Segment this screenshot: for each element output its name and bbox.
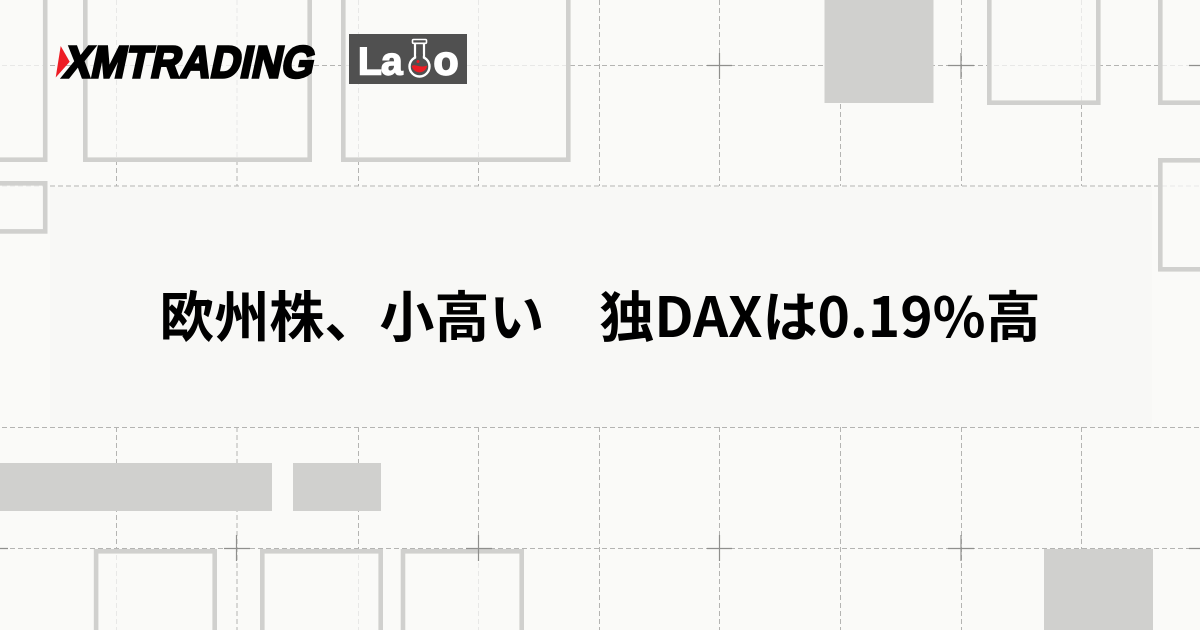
panel: centre title band [50, 187, 1152, 427]
icon: flask [410, 40, 430, 76]
solid bar: lower left short [293, 463, 381, 511]
solid block: bottom right [1044, 549, 1153, 630]
logo background [349, 34, 467, 84]
logo: Lab [349, 34, 467, 84]
logo wordmark: XMTRADING [60, 37, 321, 87]
logo letter o: o [434, 38, 459, 84]
title: 欧州株、小高い 独DAXは0.19%高 [159, 273, 1041, 353]
solid block: top right [824, 0, 934, 103]
solid bar: lower left long [0, 463, 272, 511]
outlined frames: side [0, 160, 1200, 269]
icon: red arrow [56, 46, 70, 78]
logo letters La: L [358, 40, 382, 84]
logo: Lab: a [381, 40, 403, 84]
logo: XMTRADING [56, 37, 321, 87]
outlined frames: bottom row [96, 551, 522, 630]
outlined frames: top row [0, 0, 1200, 160]
